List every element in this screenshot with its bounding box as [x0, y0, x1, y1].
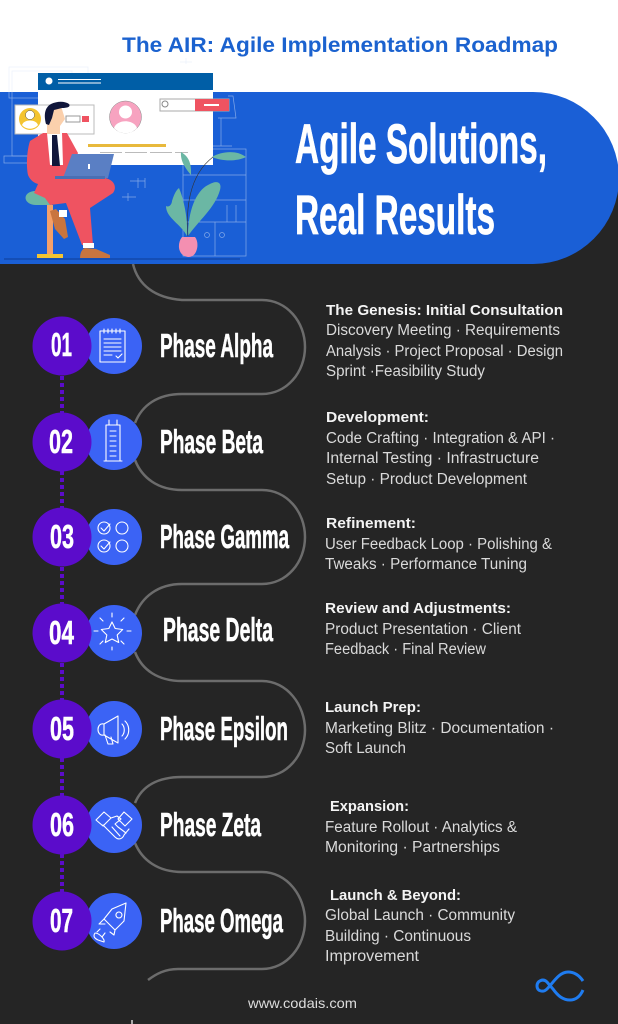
- search bar: [160, 99, 229, 111]
- text: epsilon details: Marketing Blitz · Documentation ·: [325, 720, 554, 737]
- top title: The AIR: Agile Implementation Roadmap: [122, 33, 558, 57]
- phase 04: Phase Delta: [163, 611, 273, 648]
- text: gamma details: Tweaks · Performance Tuning: [325, 556, 527, 573]
- phase 05: [32, 700, 288, 758]
- phase 02: Phase Beta: [160, 423, 263, 460]
- footer url: www.codais.com: [247, 995, 357, 1011]
- text: alpha details: Discovery Meeting · Requirements: [326, 322, 560, 339]
- profile pink: [110, 101, 142, 133]
- phase 03: 03: [50, 518, 74, 555]
- suit: [27, 133, 115, 245]
- phase 06: 06: [50, 806, 74, 843]
- icon: checklist circles: [98, 522, 128, 552]
- front shoe: [80, 248, 110, 258]
- logo: [537, 972, 583, 1000]
- phase 02: [32, 412, 263, 472]
- hero banner: [0, 92, 618, 264]
- dotted timeline: [60, 376, 64, 892]
- phase 06: Phase Zeta: [160, 806, 261, 843]
- laptop: [63, 154, 114, 178]
- text: beta details: [326, 409, 555, 488]
- text: gamma details: [325, 515, 553, 573]
- text: delta details: Product Presentation · Client: [325, 621, 522, 638]
- text: alpha details: Analysis · Project Proposal · Design: [326, 343, 563, 360]
- text: beta details: Development:: [326, 409, 429, 426]
- text: gamma details: User Feedback Loop · Polishing &: [325, 536, 553, 553]
- text: beta details: Code Crafting · Integration & API ·: [326, 430, 555, 447]
- background line art: [4, 58, 246, 256]
- stool: [47, 205, 53, 255]
- text: delta details: [325, 600, 522, 658]
- back shoe: [50, 209, 68, 239]
- text: omega details: Global Launch · Community: [325, 907, 515, 924]
- phase 07: Phase Omega: [160, 902, 283, 939]
- text: delta details: Review and Adjustments:: [325, 600, 511, 617]
- icon: handshake: [96, 812, 132, 839]
- text: zeta details: Monitoring · Partnerships: [325, 839, 500, 856]
- phase 03: [32, 508, 289, 566]
- banner heading: [295, 112, 547, 246]
- text: alpha details: Sprint ·Feasibility Study: [326, 363, 485, 380]
- text: epsilon details: Launch Prep:: [325, 699, 421, 716]
- icon: notepad: [100, 329, 125, 362]
- illustration: office worker: [4, 58, 246, 259]
- phase 01: 01: [51, 326, 72, 363]
- head: [47, 105, 65, 134]
- text: beta details: Setup · Product Development: [326, 471, 528, 488]
- text: alpha details: [326, 302, 563, 380]
- phase 03: Phase Gamma: [160, 518, 289, 555]
- text: zeta details: [325, 798, 518, 856]
- text: epsilon details: [325, 699, 554, 757]
- text: delta details: Feedback · Final Review: [325, 641, 487, 658]
- text: beta details: Internal Testing · Infrastructure: [326, 450, 539, 467]
- text: epsilon details: Soft Launch: [325, 740, 406, 757]
- phase 07: [32, 892, 283, 950]
- phase 07: 07: [50, 902, 73, 939]
- browser window: [38, 73, 213, 165]
- plant: [188, 182, 220, 236]
- phase 05: Phase Epsilon: [160, 710, 288, 747]
- text: omega details: Launch & Beyond:: [330, 887, 461, 904]
- text: zeta details: Feature Rollout · Analytics &: [325, 819, 518, 836]
- shirt and tie: [47, 133, 63, 165]
- text: omega details: Improvement: [325, 948, 420, 965]
- text: omega details: [325, 887, 515, 965]
- phase 01: [32, 316, 273, 376]
- text: omega details: Building · Continuous: [325, 928, 471, 945]
- text: gamma details: Refinement:: [326, 515, 416, 532]
- icon: office tower: [104, 420, 122, 461]
- icon: megaphone: [98, 716, 129, 744]
- text: zeta details: Expansion:: [330, 798, 409, 815]
- icon: shining star: [94, 613, 131, 650]
- profile card yellow: [15, 105, 94, 134]
- text: alpha details: The Genesis: Initial Consultation: [326, 302, 563, 319]
- phase 04: [32, 604, 273, 662]
- phase 05: 05: [50, 710, 74, 747]
- phase 01: Phase Alpha: [160, 327, 273, 364]
- phase 02: 02: [49, 423, 73, 460]
- serpentine connector: [133, 264, 305, 980]
- icon: rocket: [94, 903, 126, 942]
- phase 06: [32, 796, 261, 854]
- phase 04: 04: [49, 614, 74, 651]
